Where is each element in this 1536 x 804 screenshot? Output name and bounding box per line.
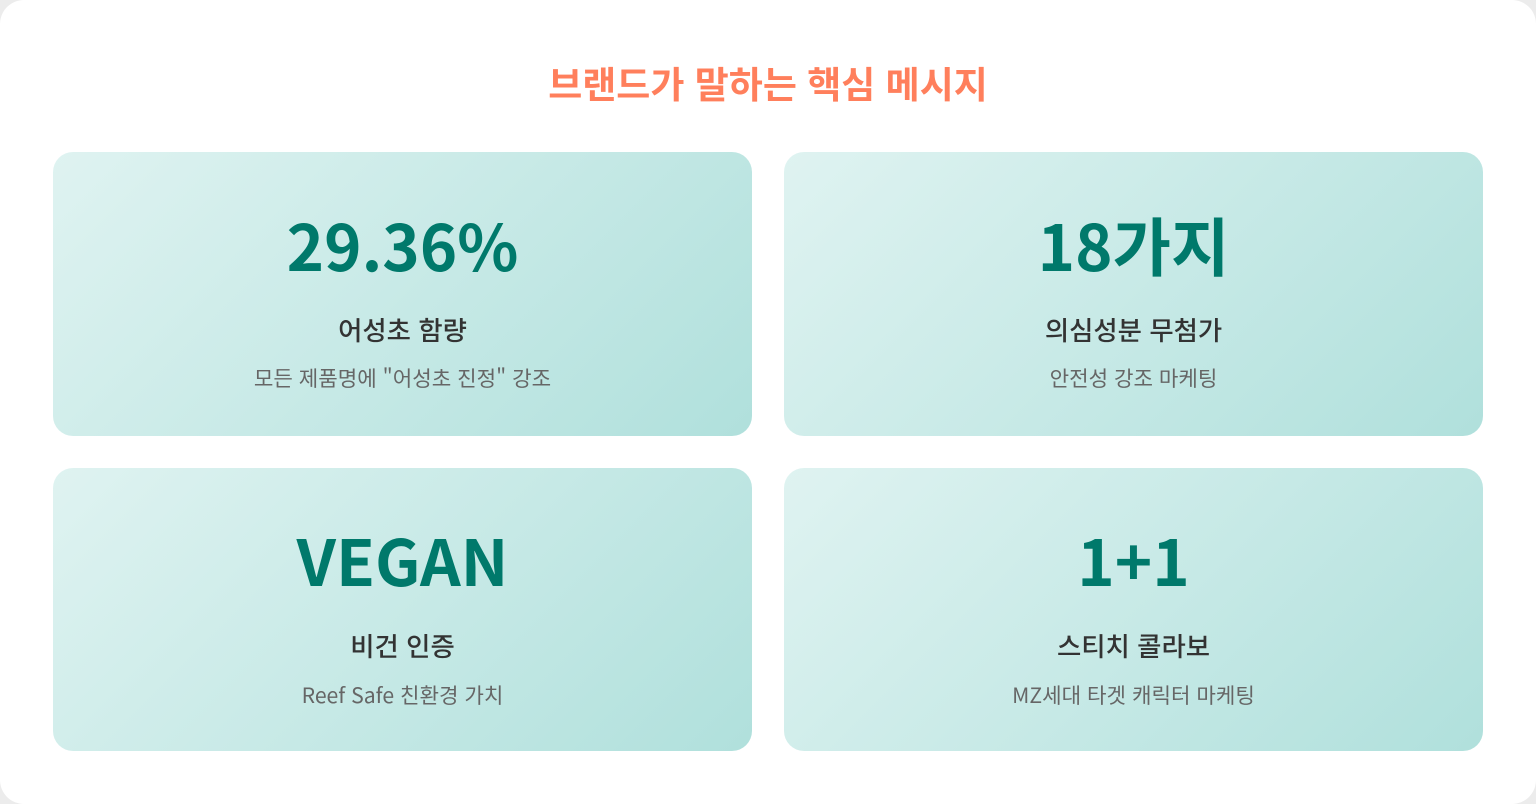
big number: 29.36%: 29.36% [287, 198, 518, 290]
card label: 의심성분 무첨가 [1045, 308, 1222, 348]
card description: 모든 제품명에 "어성초 진정" 강조 [254, 362, 551, 392]
card description: Reef Safe 친환경 가치 [302, 679, 503, 710]
card description: 안전성 강조 마케팅 [1050, 362, 1217, 392]
card label: 비건 인증 [350, 625, 455, 664]
panel: 스티치 콜라보 card [784, 468, 1483, 751]
panel: 의심성분 무첨가 card [784, 152, 1483, 436]
card description: MZ세대 타겟 캐릭터 마케팅 [1012, 679, 1255, 710]
panel: 비건 인증 card [53, 468, 752, 751]
big number: 18가지: 18가지 [1038, 198, 1229, 290]
title: 브랜드가 말하는 핵심 메시지 [548, 55, 988, 109]
big number: 1+1: 1+1 [1077, 513, 1190, 605]
card label: 스티치 콜라보 [1057, 625, 1210, 664]
panel: 어성초 함량 card [53, 152, 752, 436]
card label: 어성초 함량 [338, 308, 467, 348]
big word: VEGAN: VEGAN [297, 513, 508, 605]
